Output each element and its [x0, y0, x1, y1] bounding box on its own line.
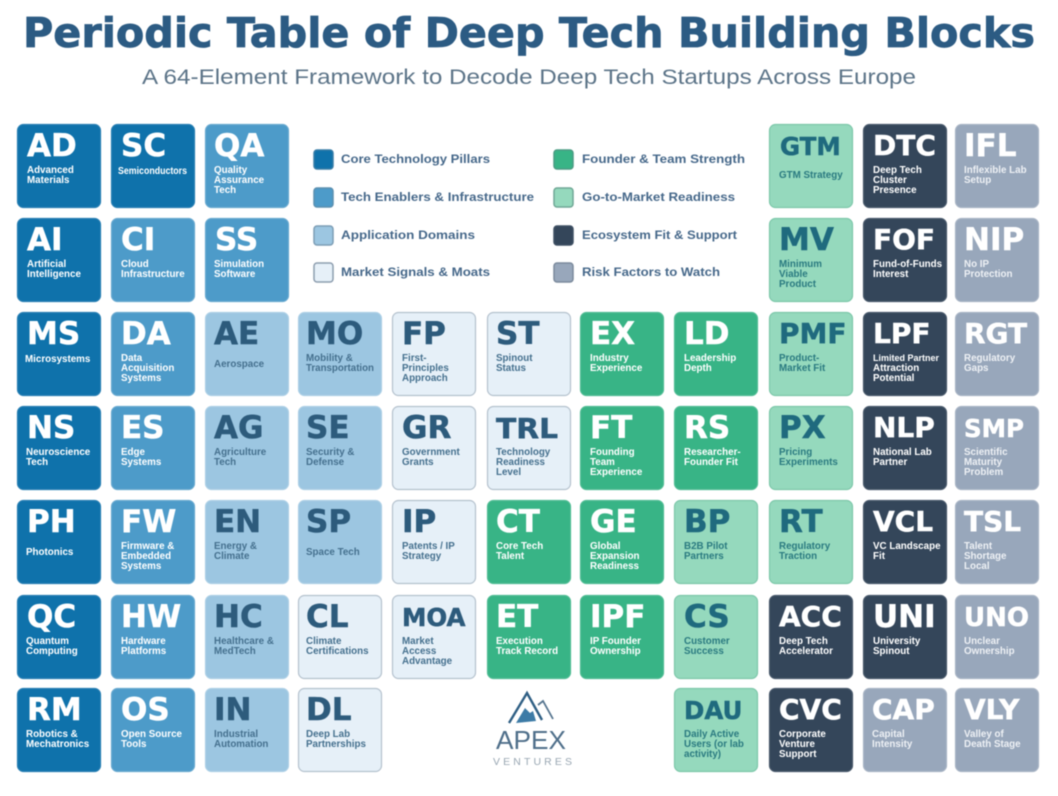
tile: PX: [770, 406, 852, 490]
tile: CS: Customer: [684, 636, 730, 647]
tile: PMF: Market Fit: [779, 363, 826, 374]
tile: ACC: Deep Tech: [779, 636, 828, 647]
tile: MOA: Advantage: [402, 656, 453, 667]
tile: IPF: IPF: [590, 599, 645, 635]
tile: ET: Execution: [496, 636, 543, 647]
tile: CT: Talent: [496, 551, 525, 562]
tile: HC: [206, 596, 288, 678]
tile: PX: PX: [779, 410, 826, 446]
tile: PX: Experiments: [779, 457, 838, 468]
tile: PH: PH: [27, 504, 76, 540]
tile: CS: [674, 596, 758, 678]
tile: EX: [580, 312, 664, 396]
tile: CVC: Corporate: [779, 729, 826, 740]
tile: CI: [112, 218, 194, 302]
tile: RT: RT: [779, 504, 823, 540]
tile: RS: [674, 406, 758, 490]
tile: VCL: VC Landscape: [873, 541, 941, 552]
tile: UNO: UNO: [964, 603, 1029, 633]
tile: OS: OS: [121, 692, 170, 728]
tile: QA: Assurance: [214, 175, 265, 186]
tile: VLY: VLY: [964, 693, 1020, 726]
tile: DA: Data: [121, 353, 142, 364]
tile: SE: Defense: [306, 457, 345, 468]
tile: AE: Aerospace: [214, 359, 265, 370]
tile: SE: [298, 406, 382, 490]
tile: CVC: Venture: [779, 739, 815, 750]
tile: VCL: Fit: [873, 551, 886, 562]
tile: RS: Founder Fit: [684, 457, 739, 468]
tile: AI: AI: [27, 222, 63, 258]
tile: DTC: Cluster: [873, 175, 907, 186]
tile: GR: Government: [402, 447, 460, 458]
tile: GE: Readiness: [590, 561, 640, 572]
tile: VLY: [956, 688, 1038, 772]
tile: TSL: Talent: [964, 541, 992, 552]
tile: SS: [206, 218, 288, 302]
logo: Apex Ventures: [493, 693, 572, 768]
tile: TSL: TSL: [964, 505, 1021, 538]
tile: MV: [770, 218, 852, 302]
tile: HC: HC: [214, 599, 263, 635]
tile: RM: [18, 688, 100, 772]
tile: ET: Track Record: [496, 646, 558, 657]
tile: TRL: Technology: [496, 447, 550, 458]
tile: MO: MO: [306, 316, 363, 352]
tile: SE: Security &: [306, 447, 354, 458]
tile: DTC: [864, 124, 946, 208]
tile: NLP: National Lab: [873, 447, 932, 458]
tile: CL: Climate: [306, 636, 341, 647]
tile: TSL: Shortage: [964, 551, 1007, 562]
tile: EX: Industry: [590, 353, 629, 364]
tile: IPF: IP Founder: [590, 636, 641, 647]
tile: IP: [392, 500, 476, 584]
tile: RGT: [956, 312, 1038, 396]
tile: PX: Pricing: [779, 447, 812, 458]
tile: NS: Neuroscience: [26, 447, 90, 458]
tile: HC: Healthcare &: [214, 636, 274, 647]
tile: IN: [206, 688, 288, 772]
legend item: Market Signals & Moats: [314, 263, 490, 282]
tile: MV: Product: [779, 279, 817, 290]
tile: FP: FP: [402, 316, 446, 352]
tile: FOF: Interest: [873, 269, 909, 280]
tile: LD: Leadership: [684, 353, 736, 364]
tile: DL: DL: [306, 692, 352, 728]
tile: AI: Artificial: [27, 259, 66, 270]
tile: LD: [674, 312, 758, 396]
tile: ES: ES: [121, 410, 165, 446]
tile: CI: CI: [121, 222, 155, 258]
tile: QA: QA: [214, 128, 264, 164]
tile: MV: Minimum: [779, 259, 822, 270]
tile: DL: Deep Lab: [306, 729, 350, 740]
tile: DAU: [674, 688, 758, 772]
tile: TRL: Level: [496, 467, 521, 478]
tile: QC: QC: [27, 599, 76, 635]
tile: IFL: IFL: [964, 128, 1016, 164]
tile: NLP: [864, 406, 946, 490]
tile: CT: Core Tech: [496, 541, 543, 552]
tile: SC: [112, 124, 194, 208]
tile: DAU: DAU: [684, 696, 742, 725]
legend item: Risk Factors to Watch: Risk Factors to Watch: [582, 265, 720, 279]
tile: MV: MV: [779, 222, 834, 258]
tile: CT: [488, 500, 570, 584]
tile: DA: Acquisition: [121, 363, 174, 374]
tile: UNO: [956, 596, 1038, 678]
tile: MO: Transportation: [306, 363, 374, 374]
subtitle: A 64-Element Framework to Decode Deep Tech Startups Across Europe: [142, 66, 916, 89]
tile: FP: Approach: [402, 373, 448, 384]
tile: NS: [18, 406, 100, 490]
tile: BP: BP: [684, 504, 730, 540]
tile: RT: Regulatory: [779, 541, 830, 552]
tile: OS: Open Source: [121, 729, 182, 740]
tile: FT: FT: [590, 410, 632, 446]
tile: PMF: PMF: [779, 317, 847, 350]
tile: ST: [488, 312, 570, 396]
tile: EN: EN: [214, 504, 261, 540]
tile: ET: [488, 596, 570, 678]
tile: PH: Photonics: [26, 547, 74, 558]
tile: FOF: [864, 218, 946, 302]
tile: NS: NS: [27, 410, 75, 446]
tile: DTC: DTC: [873, 129, 936, 162]
legend item: Go-to-Market Readiness: Go-to-Market Readiness: [582, 190, 735, 204]
tile: RM: Robotics &: [26, 729, 78, 740]
tile: SC: Semiconductors: [118, 166, 187, 177]
tile: IN: Automation: [214, 739, 268, 750]
tile: FW: Systems: [121, 561, 162, 572]
tile: CAP: [864, 688, 946, 772]
tile: ACC: ACC: [779, 600, 842, 633]
tile: ST: ST: [496, 316, 539, 352]
tile: QA: Tech: [214, 185, 236, 196]
tile: GR: GR: [402, 410, 451, 446]
tile: QC: Quantum: [26, 636, 69, 647]
tile: IP: IP: [402, 504, 436, 540]
tile: FW: Embedded: [121, 551, 171, 562]
tile: GTM: [770, 124, 852, 208]
tile: MOA: [392, 596, 476, 678]
tile: SMP: Scientific: [964, 447, 1008, 458]
tile: GR: Grants: [402, 457, 434, 468]
tile: AG: Tech: [214, 457, 236, 468]
tile: VLY: Valley of: [964, 729, 1004, 740]
tile: CVC: CVC: [779, 693, 842, 726]
tile: CT: CT: [496, 504, 540, 540]
tile: FP: Principles: [402, 363, 449, 374]
tile: QA: [206, 124, 288, 208]
tile: TSL: Local: [964, 561, 990, 572]
tile: IPF: [580, 596, 664, 678]
tile: SMP: [956, 406, 1038, 490]
tile: ST: Status: [496, 363, 526, 374]
tile: DL: Partnerships: [306, 739, 366, 750]
tile: FOF: Fund-of-Funds: [873, 259, 942, 270]
tile: FT: Founding: [590, 447, 635, 458]
tile: NIP: No IP: [964, 259, 989, 270]
tile: SMP: Problem: [964, 467, 1003, 478]
tile: DAU: activity): [684, 749, 721, 760]
tile: UNO: Ownership: [964, 646, 1015, 657]
legend item: Application Domains: [314, 226, 475, 245]
tile: QA: Quality: [214, 165, 247, 176]
tile: HW: [112, 596, 194, 678]
tile: TSL: [956, 500, 1038, 584]
tile: QC: Computing: [26, 646, 78, 657]
tile: ACC: [770, 596, 852, 678]
tile: AI: [18, 218, 100, 302]
tile: VLY: Death Stage: [964, 739, 1021, 750]
tile: GE: Expansion: [590, 551, 640, 562]
tile: OS: [112, 688, 194, 772]
tile: HC: MedTech: [214, 646, 256, 657]
tile: IN: IN: [214, 692, 251, 728]
tile: HW: Platforms: [121, 646, 167, 657]
tile: CI: Infrastructure: [121, 269, 185, 280]
tile: AE: [206, 312, 288, 396]
tile: GE: [580, 500, 664, 584]
tile: HW: Hardware: [121, 636, 166, 647]
legend item: Ecosystem Fit & Support: Ecosystem Fit & Support: [582, 228, 737, 242]
tile: PH: [18, 500, 100, 584]
tile: AD: Advanced: [27, 165, 74, 176]
legend item: Founder & Team Strength: [554, 150, 745, 169]
tile: ST: Spinout: [496, 353, 532, 364]
tile: LPF: Attraction: [873, 363, 919, 374]
tile: LD: LD: [684, 316, 730, 352]
legend item: Risk Factors to Watch: [554, 263, 720, 282]
tile: CVC: Support: [779, 749, 817, 760]
tile: ES: Edge: [121, 447, 145, 458]
tile: IFL: Inflexible Lab: [964, 165, 1027, 176]
tile: DA: [112, 312, 194, 396]
tile: AG: Agriculture: [214, 447, 266, 458]
tile: EX: EX: [590, 316, 635, 352]
tile: CL: [298, 596, 382, 678]
tile: SP: Space Tech: [306, 547, 360, 558]
tile: GE: GE: [590, 504, 637, 540]
tile: IPF: Ownership: [590, 646, 641, 657]
tile: CAP: CAP: [872, 693, 935, 726]
tile: ES: [112, 406, 194, 490]
tile: UNI: Spinout: [873, 646, 910, 657]
tile: FP: [392, 312, 476, 396]
legend item: Tech Enablers & Infrastructure: [314, 188, 534, 207]
tile: NIP: Protection: [964, 269, 1012, 280]
tile: EX: Experience: [590, 363, 643, 374]
tile: CAP: Capital: [872, 729, 905, 740]
tile: GE: Global: [590, 541, 620, 552]
tile: FP: First-: [402, 353, 426, 364]
tile: AD: [18, 124, 100, 208]
tile: DA: DA: [121, 316, 171, 352]
tile: FT: Experience: [590, 467, 643, 478]
tile: LPF: [864, 312, 946, 396]
legend item: Market Signals & Moats: Market Signals & Moats: [341, 265, 490, 279]
tile: RM: RM: [27, 692, 82, 728]
legend item: Go-to-Market Readiness: [554, 188, 735, 207]
tile: RGT: Gaps: [964, 363, 989, 374]
tile: MOA: MOA: [402, 603, 466, 632]
tile: BP: Partners: [684, 551, 724, 562]
tile: NIP: [956, 218, 1038, 302]
tile: IN: Industrial: [214, 729, 258, 740]
tile: CL: Certifications: [306, 646, 369, 657]
tile: GR: [392, 406, 476, 490]
tile: AD: AD: [27, 128, 77, 164]
tile: UNO: Unclear: [964, 636, 1000, 647]
tile: RS: Researcher-: [684, 447, 741, 458]
tile: HW: HW: [121, 599, 181, 635]
tile: NLP: Partner: [873, 457, 907, 468]
tile: SC: SC: [121, 128, 166, 164]
legend item: Core Technology Pillars: [314, 150, 490, 169]
tile: MO: Mobility &: [306, 353, 353, 364]
tile: LPF: Limited Partner: [873, 353, 939, 363]
tile: RGT: RGT: [964, 317, 1027, 350]
tile: VCL: [864, 500, 946, 584]
tile: GTM: GTM Strategy: [779, 170, 843, 181]
tile: DA: Systems: [121, 373, 162, 384]
tile: RT: Traction: [779, 551, 817, 562]
legend item: Tech Enablers & Infrastructure: Tech Enablers & Infrastructure: [341, 190, 534, 204]
tile: PMF: Product-: [779, 353, 819, 364]
tile: SP: [298, 500, 382, 584]
tile: MV: Viable: [779, 269, 808, 280]
tile: TRL: [488, 406, 570, 490]
tile: GTM: GTM: [780, 132, 841, 161]
tile: LPF: LPF: [873, 317, 930, 350]
tile: CS: CS: [684, 599, 730, 635]
tile: SP: SP: [306, 504, 351, 540]
tile: IP: Patents / IP: [402, 541, 455, 552]
tile: IP: Strategy: [402, 551, 442, 562]
tile: DL: [298, 688, 382, 772]
tile: AI: Intelligence: [27, 269, 81, 280]
title: Periodic Table of Deep Tech Building Blocks: [23, 9, 1035, 57]
tile: BP: [674, 500, 758, 584]
tile: FW: Firmware &: [121, 541, 174, 552]
tile: MO: [298, 312, 382, 396]
tile: MOA: Access: [402, 646, 437, 657]
legend: [314, 150, 745, 282]
tile: SMP: SMP: [964, 414, 1024, 443]
tile: BP: B2B Pilot: [684, 541, 728, 552]
tile: ET: ET: [496, 599, 538, 635]
tile: AG: [206, 406, 288, 490]
tile: CI: Cloud: [121, 259, 149, 270]
tile: FW: FW: [121, 504, 176, 540]
tile: LD: Depth: [684, 363, 712, 374]
tile: AD: Materials: [27, 175, 70, 186]
tile: SMP: Maturity: [964, 457, 1003, 468]
tile: EN: Energy &: [214, 541, 257, 552]
tile: EN: [206, 500, 288, 584]
tile: IFL: Setup: [964, 175, 991, 186]
tile: MS: [18, 312, 100, 396]
tile: UNI: UNI: [873, 599, 936, 635]
legend item: Founder & Team Strength: Founder & Team Strength: [582, 152, 745, 166]
tile: RT: [770, 500, 852, 584]
tile: FW: [112, 500, 194, 584]
tile: CL: CL: [306, 599, 349, 635]
tile: UNI: [864, 596, 946, 678]
tile: FT: Team: [590, 457, 615, 468]
tile: IFL: [956, 124, 1038, 208]
legend item: Ecosystem Fit & Support: [554, 226, 737, 245]
tile: CAP: Intensity: [872, 739, 913, 750]
tile: DAU: Users (or lab: [684, 739, 744, 750]
tile: DTC: Deep Tech: [873, 165, 922, 176]
tile: RM: Mechatronics: [26, 739, 90, 750]
tile: NIP: NIP: [964, 222, 1024, 258]
tile: AG: AG: [214, 410, 263, 446]
tile: SS: Software: [214, 269, 256, 280]
tile: CVC: [770, 688, 852, 772]
tile: EN: Climate: [214, 551, 250, 562]
tile: TRL: TRL: [496, 412, 558, 445]
tile: SS: SS: [215, 222, 258, 258]
tile: NLP: NLP: [873, 411, 935, 444]
tile: SE: SE: [306, 410, 350, 446]
logo wordmark: APEX: [496, 725, 566, 755]
tile: UNI: University: [873, 636, 920, 647]
tile: LPF: Potential: [873, 373, 915, 384]
tile: FOF: FOF: [873, 223, 935, 256]
tile: MS: Microsystems: [25, 354, 91, 365]
tile: NS: Tech: [26, 457, 48, 468]
tile: VCL: VCL: [873, 505, 933, 538]
tile: QC: [18, 596, 100, 678]
tile: PMF: [770, 312, 852, 396]
tile: DAU: Daily Active: [684, 729, 739, 740]
legend item: Application Domains: Application Domains: [341, 228, 475, 242]
legend item: Core Technology Pillars: Core Technology Pillars: [341, 152, 490, 166]
tile: ES: Systems: [121, 457, 162, 468]
icon: mountains: [509, 693, 553, 723]
tile: ACC: Accelerator: [779, 646, 833, 657]
tile: RS: RS: [684, 410, 730, 446]
logo tagline: VENTURES: [493, 756, 572, 768]
tile: SS: Simulation: [214, 259, 264, 270]
tile: DTC: Presence: [873, 185, 917, 196]
tile: MOA: Market: [402, 636, 434, 647]
tile: MS: MS: [27, 316, 80, 352]
tile: CS: Success: [684, 646, 724, 657]
tile: FT: [580, 406, 664, 490]
tile: TRL: Readiness: [496, 457, 546, 468]
tile: RGT: Regulatory: [964, 353, 1015, 364]
tile: OS: Tools: [121, 739, 147, 750]
tile: AE: AE: [214, 316, 259, 352]
